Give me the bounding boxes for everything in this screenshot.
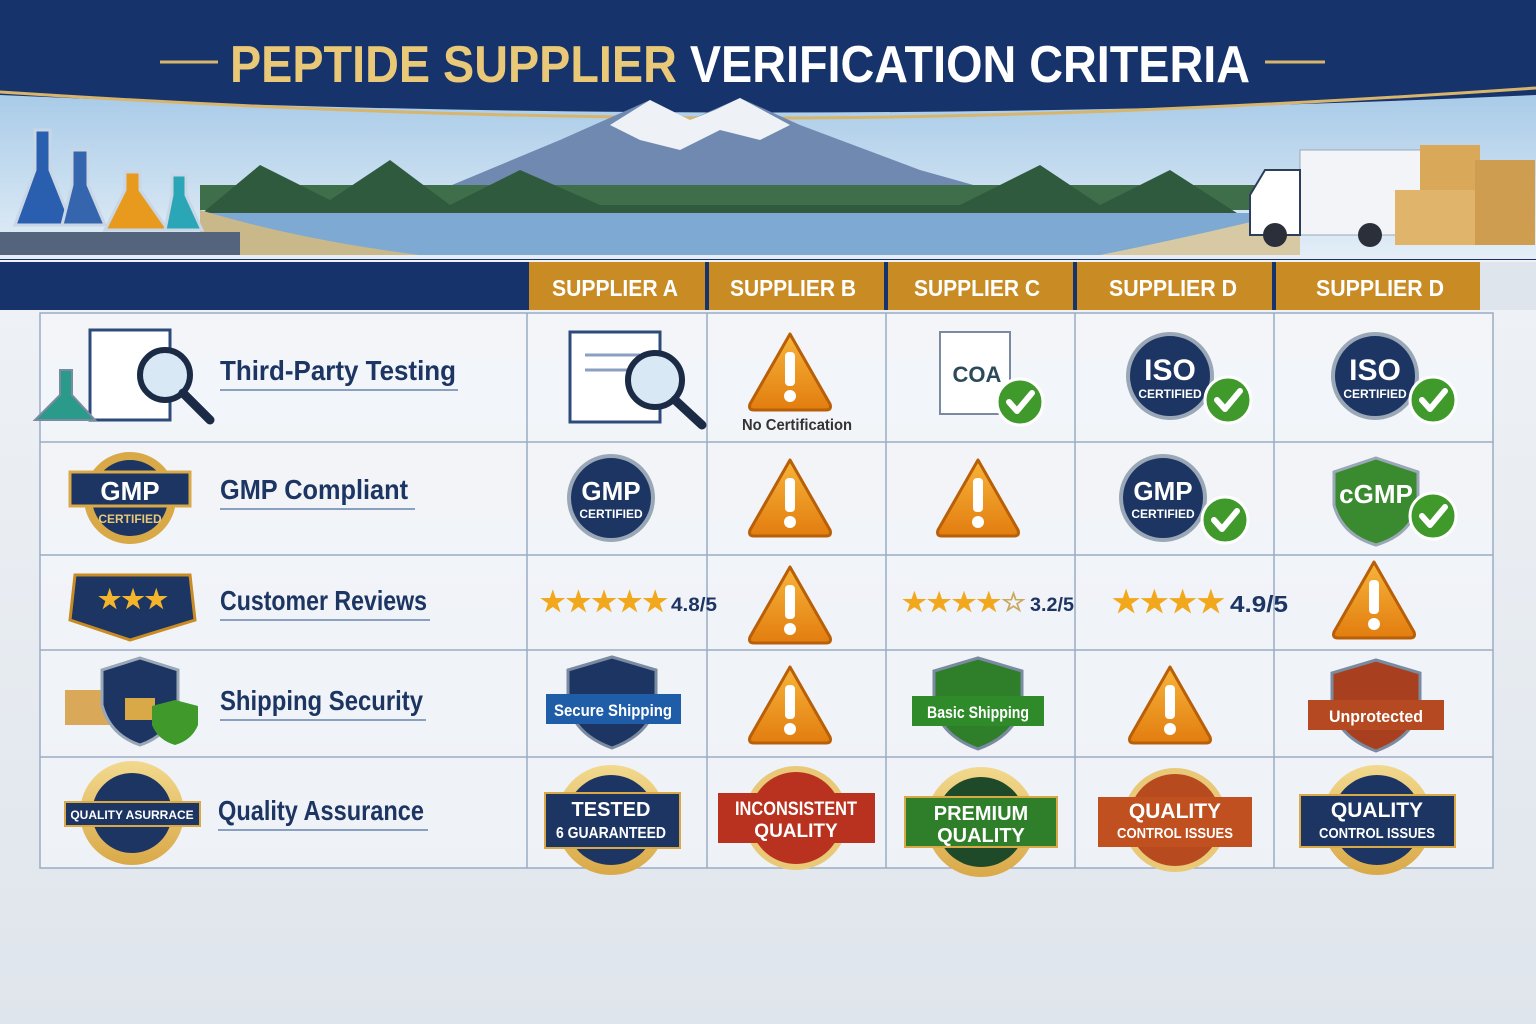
row 5: quality badges [545, 765, 1455, 877]
row 4: shipping: Basic Shipping [927, 703, 1029, 722]
row 3: reviews: 3.2/5 [1030, 595, 1074, 616]
row 3: reviews: 4.9/5 [1230, 591, 1288, 617]
table header row: SUPPLIER C [914, 275, 1040, 301]
table header row: SUPPLIER A [552, 275, 678, 301]
row labels: Shipping Security [220, 685, 423, 716]
title: PEPTIDE SUPPLIER VERIFICATION CRITERIA [230, 36, 1250, 94]
row 1: third-party testing cells: CERTIFIED [1343, 387, 1407, 401]
row 2: GMP cells: GMP [581, 476, 641, 506]
row 1: third-party testing cells: CERTIFIED [1138, 387, 1202, 401]
row 1: third-party testing cells: ISO [1349, 354, 1401, 387]
table grid [40, 313, 1493, 868]
table header row: SUPPLIER D [1109, 275, 1237, 301]
row 2: GMP cells: CERTIFIED [579, 507, 643, 521]
header banner [0, 0, 1536, 260]
row icons (left): CERTIFIED [98, 512, 162, 526]
row 5: quality badges: PREMIUM [934, 803, 1028, 825]
row 5: quality badges: QUALITY [937, 825, 1026, 847]
table header row: SUPPLIER D [1316, 275, 1444, 301]
table header row [0, 262, 1536, 310]
row icons (left): ★★★ [98, 584, 169, 614]
row labels: Third-Party Testing [220, 355, 456, 386]
row 5: quality badges: CONTROL ISSUES [1319, 825, 1435, 842]
row 5: quality badges: QUALITY [1129, 800, 1221, 823]
row 5: quality badges: QUALITY [1331, 799, 1423, 822]
icon: flasks [0, 130, 240, 256]
row 5: quality badges: 6 GUARANTEED [556, 825, 666, 842]
row 3: reviews: ★★★★☆ [902, 587, 1027, 617]
row 1: third-party testing cells: No Certification [742, 417, 852, 434]
row labels: GMP Compliant [220, 474, 408, 505]
row 4: shipping: Secure Shipping [554, 701, 672, 720]
icon: truck and boxes [1250, 145, 1535, 247]
row 3: reviews: ★★★★★ [540, 586, 668, 617]
table header row: SUPPLIER B [730, 275, 856, 301]
row 2: GMP cells: cGMP [1339, 479, 1413, 509]
row 1: third-party testing cells [570, 332, 1456, 434]
row 2: GMP cells: CERTIFIED [1131, 507, 1195, 521]
row 1: third-party testing cells: ISO [1144, 354, 1196, 387]
row icons (left): QUALITY ASURRACE [70, 808, 194, 822]
row 3: reviews: 4.8/5 [671, 595, 717, 616]
row 4: shipping: Unprotected [1329, 707, 1423, 726]
mountains [380, 98, 1080, 215]
row 3: reviews [540, 562, 1414, 643]
row 5: quality badges: TESTED [572, 799, 650, 821]
row 2: GMP cells [569, 456, 1456, 545]
row 4: shipping [546, 657, 1444, 751]
row labels: Quality Assurance [218, 795, 424, 826]
row icons (left): GMP [100, 476, 160, 506]
row 1: third-party testing cells: COA [953, 362, 1002, 387]
row labels [218, 355, 458, 830]
row 5: quality badges: CONTROL ISSUES [1117, 825, 1233, 842]
row labels: Customer Reviews [220, 585, 427, 616]
row 5: quality badges: INCONSISTENT [735, 799, 857, 820]
row 5: quality badges: QUALITY [754, 821, 838, 842]
row 3: reviews: ★★★★ [1112, 586, 1225, 619]
row 2: GMP cells: GMP [1133, 476, 1193, 506]
row icons (left) [35, 330, 210, 865]
